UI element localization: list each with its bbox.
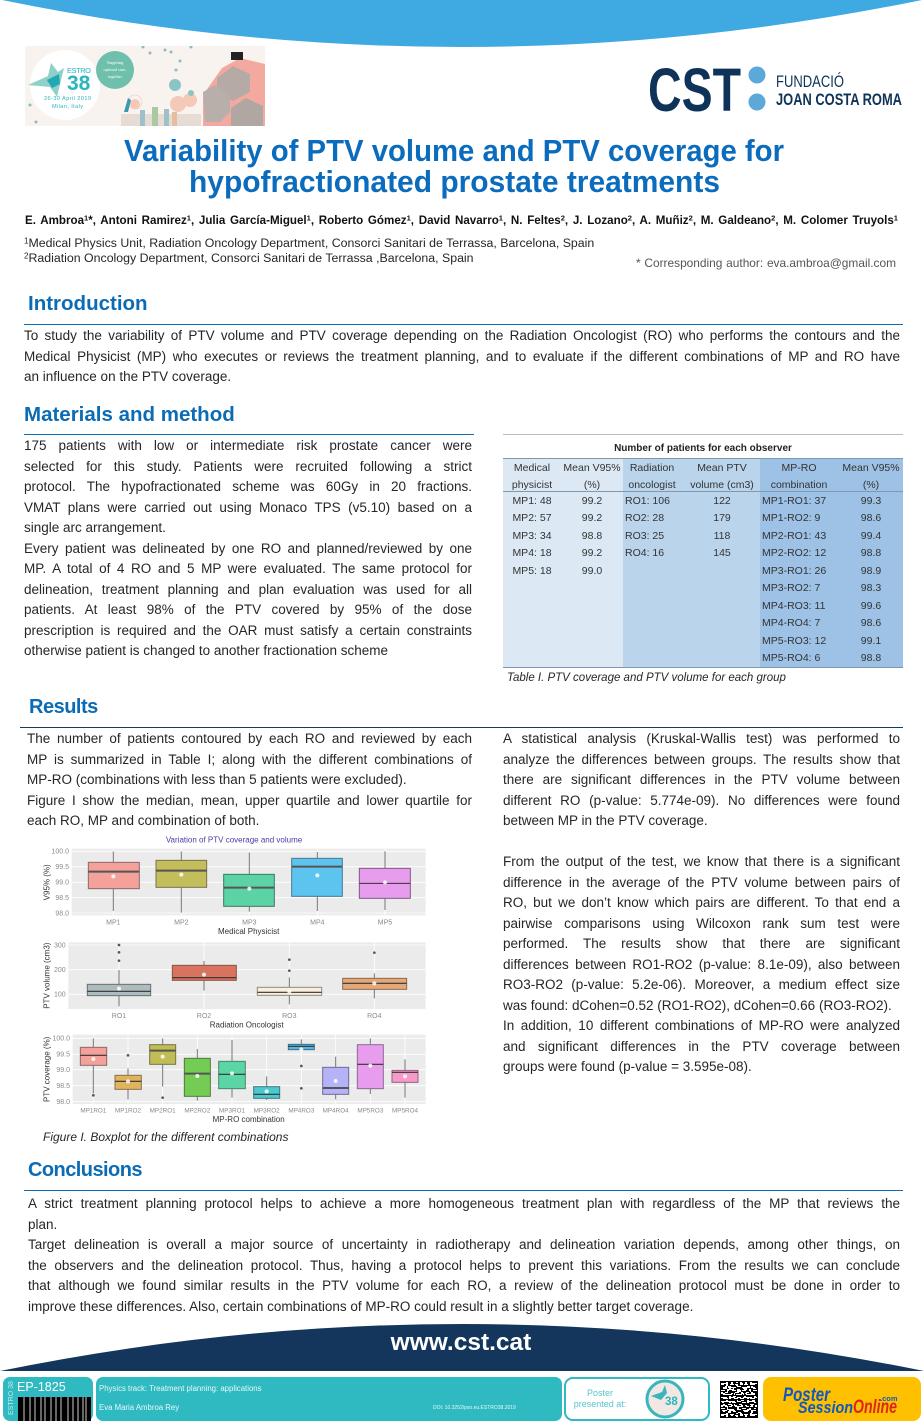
PosterSessionOnline logo: .com: [880, 1394, 898, 1403]
table header: mean PTV volume: Mean PTV volume (cm3): [690, 462, 754, 490]
text: results right: there are significant differences in the PTV volume between: [503, 772, 900, 787]
text: results right: RO3-RO2 (p-value: 5.2e-06). Moreover, a medium effect size: [503, 977, 900, 992]
text: results left: each RO, MP and combination of both.: [27, 813, 259, 828]
table header: MP-RO combination: MP-RO combination: [771, 462, 827, 490]
boxplot: MP-RO combination: 99.0: [56, 1067, 70, 1074]
text: materials and method: delineation, treatment planning and plan evaluation was used for all: [24, 582, 472, 596]
text: materials and method: single arc arrangement.: [24, 520, 166, 535]
PosterSessionOnline logo: Poster: [783, 1385, 831, 1406]
text: results right: between MP in the PTV coverage.: [503, 813, 708, 828]
text: results left: The number of patients contoured by each RO and reviewed by each: [27, 731, 472, 746]
boxplot: medical physicist: V95% (%): [42, 864, 51, 900]
ESTRO 38 congress banner: [25, 46, 265, 126]
table header: mean V95: Mean V95% (%): [563, 462, 621, 490]
PosterSessionOnline logo: Session: [798, 1398, 853, 1417]
boxplot: radiation oncologist: PTV volume (cm3): [42, 942, 51, 1009]
heading: materials and method: Materials and method: [24, 403, 235, 426]
poster track box: DOI: 10.3252/pso.eu.ESTRO38.2019: [433, 1405, 516, 1411]
column: RO counts: RO1: 106 RO2: 28 RO3: 25 RO4: 16: [625, 494, 670, 559]
text: conclusions: that although we found similar results in the PTV volume for each RO, a review of the delineation protocol must be done in order to: [28, 1278, 900, 1293]
boxplot: radiation oncologist: RO4: [367, 1013, 382, 1020]
boxplot: medical physicist: Variation of PTV coverage and volume: [166, 836, 303, 845]
text: materials and method: protocol. The hypofractionated scheme was 60Gy in 20 fractions.: [24, 479, 472, 494]
text: materials and method: Every patient was delineated by one RO and planned/reviewed by one: [24, 540, 472, 556]
text: introduction: Medical Physicist (MP) who executes or reviews the treatment planning, and to evaluate if the different combinations of MP and RO have: [24, 348, 900, 364]
poster track box: Physics track: Treatment planning: applications: [99, 1384, 262, 1393]
boxplot: MP-RO combination: 98.5: [56, 1083, 70, 1090]
boxplot: MP-RO combination: MP5RO3: [357, 1108, 384, 1115]
boxplot: MP-RO combination: MP4RO4: [323, 1108, 349, 1115]
text: introduction: To study the variability of PTV volume and PTV coverage depending on the Radiation Oncologist (RO) who performs the contours and the: [24, 328, 900, 343]
boxplot: medical physicist: MP4: [310, 919, 325, 926]
affiliations: 1Medical Physics Unit, Radiation Oncology Department, Consorci Sanitari de Terrassa, Barcelona, Spain: [24, 236, 594, 250]
boxplot: MP-RO combination: MP2RO2: [184, 1108, 211, 1115]
CST Fundació Joan Costa Roma logo: CST: [648, 56, 741, 124]
text: results right: A statistical analysis (Kruskal-Wallis test) was performed to: [503, 731, 900, 746]
text: conclusions: plan.: [28, 1216, 57, 1232]
text: results left: [27, 731, 472, 828]
text: results right: RO, but we don’t know which pairs are different. To that end a: [503, 895, 900, 910]
text: results right: and significant differences in the PTV coverage between: [503, 1038, 900, 1054]
text: results right: was found: dCohen=0.52 (RO1-RO2), dCohen=0.66 (RO3-RO2).: [503, 998, 892, 1012]
footer band with website: [0, 1324, 924, 1371]
PosterSessionOnline logo: Online: [853, 1397, 897, 1418]
title: [124, 133, 784, 199]
table header: mean V95 combination: Mean V95% (%): [842, 462, 900, 490]
table: patients for each observer: [503, 434, 903, 668]
heading: results: Results: [29, 696, 98, 718]
text: conclusions: the observers and the delineation protocol. Thus, having a protocol helps to prevent this variations. From the results we can conclude: [28, 1258, 900, 1272]
table title: Number of patients for each observer: [614, 443, 792, 454]
text: results right: performed. The results show that there are significant: [503, 936, 900, 951]
PosterSessionOnline logo: [763, 1377, 921, 1421]
ESTRO 38 congress banner: 38: [67, 72, 91, 95]
boxplot: medical physicist: 99.0: [55, 880, 69, 887]
boxplot: MP-RO combination: MP1RO2: [115, 1108, 141, 1115]
boxplot: radiation oncologist: 300: [54, 942, 66, 949]
affiliations: 2Radiation Oncology Department, Consorci Sanitari de Terrassa ,Barcelona, Spain: [24, 251, 474, 265]
text: results right: In addition, 10 different combinations of MP-RO were analyzed: [503, 1018, 900, 1033]
text: results right: groups were found (p-value = 3.595e-08).: [503, 1059, 752, 1074]
text: conclusions: A strict treatment planning protocol helps to achieve a more homogeneous treatment plan with regardless of the MP that reviews the: [28, 1196, 900, 1211]
text: results right: analyze the differences between groups. The results show that: [503, 752, 900, 766]
text: materials and method: VMAT plans were carried out using Monaco TPS (v5.10) based on a: [24, 500, 472, 514]
heading: introduction: Introduction: [28, 292, 148, 315]
text: conclusions: [28, 1196, 900, 1314]
authors: E. Ambroa1*, Antoni Ramirez1, Julia García-Miguel1, Roberto Gómez1, David Navarro1, N. Feltes2, J. Lozano2, A. Muñiz2, M. Galdeano2, M. Colomer Truyols1: [25, 214, 898, 227]
text: materials and method: [24, 438, 472, 658]
top blue arc: [2, 0, 922, 47]
boxplot: medical physicist: MP2: [174, 919, 189, 926]
boxplot: medical physicist: [42, 836, 426, 936]
ESTRO 38 congress banner: 26-30 April 2019: [44, 96, 91, 102]
boxplot: medical physicist: MP3: [242, 919, 257, 926]
text: results right: different RO (p-value: 5.774e-09). No differences were found: [503, 792, 900, 808]
text: results right: From the output of the test, we know that there is a significant: [503, 854, 900, 869]
corresponding author: * Corresponding author: eva.ambroa@gmail.com: [636, 256, 896, 270]
footer band with website: www.cst.cat: [390, 1329, 531, 1356]
heading: conclusions: Conclusions: [28, 1159, 142, 1181]
text: results right: differences between RO1-RO2 (p-value: 8.1e-09), also between: [503, 956, 900, 972]
presented at box: [564, 1377, 710, 1421]
ESTRO 38 congress banner: together: [108, 74, 123, 79]
text: results left: MP is summarized in Table I; along with the different combinations of: [27, 752, 472, 766]
text: introduction: an influence on the PTV coverage.: [24, 369, 231, 384]
boxplot: radiation oncologist: [42, 942, 426, 1029]
presented at box: Poster presented at:: [574, 1388, 626, 1409]
boxplot: MP-RO combination: MP-RO combination: [213, 1115, 285, 1124]
ESTRO 38 congress banner: Targeting: [107, 60, 124, 65]
figure caption: Figure I. Boxplot for the different combinations: [43, 1130, 288, 1144]
boxplot: medical physicist: 100.0: [51, 849, 69, 856]
text: materials and method: prescription is required and the OAR must satisfy a certain constraints: [24, 622, 472, 638]
column: RO mean volume: 122 179 118 145: [713, 494, 731, 559]
column: MP-RO combinations: MP1-RO1: 37 MP1-RO2: 9 MP2-RO1: 43 MP2-RO2: 12 MP3-RO1: 26 MP3-RO2: 7 MP4-RO3: 11 MP4-RO4: 7 MP5-RO3: 12 MP5-RO4: 6: [762, 494, 826, 664]
poster ID box: [3, 1377, 93, 1421]
boxplot: MP-RO combination: [42, 1034, 426, 1124]
table caption: Table I. PTV coverage and PTV volume for each group: [507, 672, 786, 684]
boxplot: MP-RO combination: MP2RO1: [150, 1108, 176, 1115]
text: results left: Figure I show the median, mean, upper quartile and lower quartile for: [27, 792, 472, 808]
column: combination mean V95: 99.3 98.6 99.4 98.8 98.9 98.3 99.6 98.6 99.1 98.8: [861, 494, 881, 664]
boxplot: radiation oncologist: 200: [54, 967, 66, 974]
QR code: [720, 1381, 758, 1418]
boxplot: MP-RO combination: PTV coverage (%): [42, 1036, 51, 1102]
poster track box: [96, 1377, 562, 1421]
text: materials and method: 175 patients with low or intermediate risk prostate cancer were: [24, 438, 472, 453]
boxplot: MP-RO combination: MP5RO4: [392, 1108, 418, 1115]
ESTRO 38 congress banner: ESTRO: [67, 66, 91, 75]
boxplot: medical physicist: 98.0: [55, 910, 69, 917]
boxplot: radiation oncologist: 100: [54, 992, 66, 999]
table header: medical physicist: Medical physicist: [512, 462, 552, 490]
boxplot: medical physicist: MP5: [378, 919, 392, 926]
poster track box: Eva Maria Ambroa Rey: [99, 1403, 179, 1412]
boxplot: radiation oncologist: RO1: [112, 1013, 126, 1020]
affiliations: [24, 236, 594, 265]
text: results right: [503, 731, 900, 1074]
text: results right: pairwise comparisons using Wilcoxon rank sum test were: [503, 916, 900, 930]
title: Variability of PTV volume and PTV coverage for: [124, 133, 784, 168]
boxplot: MP-RO combination: 100.0: [52, 1036, 70, 1043]
boxplot: medical physicist: Medical Physicist: [218, 927, 280, 936]
text: materials and method: MP. A total of 4 RO and 5 MP were evaluated. The same protocol for: [24, 561, 472, 576]
text: introduction: [24, 328, 900, 384]
presented at box: 38: [665, 1396, 678, 1408]
text: results left: MP-RO (combinations with less than 5 patients were excluded).: [27, 772, 407, 787]
CST Fundació Joan Costa Roma logo: FUNDACIÓ: [776, 72, 844, 91]
column: MP mean V95: 99.2 99.2 98.8 99.2 99.0: [582, 494, 602, 577]
text: conclusions: improve these differences. Also, certain combinations of MP-RO could result in a slightly better target coverage.: [28, 1298, 693, 1314]
title: hypofractionated prostate treatments: [189, 164, 720, 199]
text: materials and method: otherwise patient is changed to another fractionation scheme: [24, 643, 388, 658]
text: conclusions: Target delineation is overall a major source of uncertainty in radiotherapy and delineation variation depends, among other things, on: [28, 1237, 900, 1252]
text: results right: difference in the average of the PTV volume between pairs of: [503, 874, 900, 890]
boxplot: MP-RO combination: 99.5: [56, 1052, 70, 1059]
table header: radiation oncologist: Radiation oncologist: [628, 462, 676, 490]
boxplot: MP-RO combination: 98.0: [56, 1099, 70, 1106]
text: materials and method: patients. At least 98% of the PTV covered by 95% of the dose: [24, 602, 472, 617]
ESTRO 38 congress banner: Milan, Italy: [52, 104, 83, 110]
boxplot: radiation oncologist: RO2: [197, 1013, 211, 1020]
ESTRO 38 congress banner: optimal care,: [104, 67, 126, 73]
text: materials and method: selected for this study. Patients were recruited following a strict: [24, 458, 472, 474]
column: MP counts: MP1: 48 MP2: 57 MP3: 34 MP4: 18 MP5: 18: [512, 494, 552, 577]
boxplot: medical physicist: 98.5: [55, 895, 69, 902]
boxplot: MP-RO combination: MP3RO2: [254, 1108, 280, 1115]
boxplot: MP-RO combination: MP1RO1: [80, 1108, 107, 1115]
boxplot: radiation oncologist: RO3: [282, 1013, 297, 1020]
boxplot: MP-RO combination: MP4RO3: [288, 1108, 315, 1115]
boxplot: radiation oncologist: Radiation Oncologist: [210, 1020, 284, 1029]
boxplot: MP-RO combination: MP3RO1: [219, 1108, 245, 1115]
CST Fundació Joan Costa Roma logo: [648, 56, 902, 124]
boxplot: medical physicist: MP1: [106, 919, 121, 926]
poster ID box: EP-1825: [17, 1380, 66, 1394]
poster ID box: ESTRO 38: [8, 1381, 15, 1415]
boxplot: medical physicist: 99.5: [55, 864, 69, 871]
